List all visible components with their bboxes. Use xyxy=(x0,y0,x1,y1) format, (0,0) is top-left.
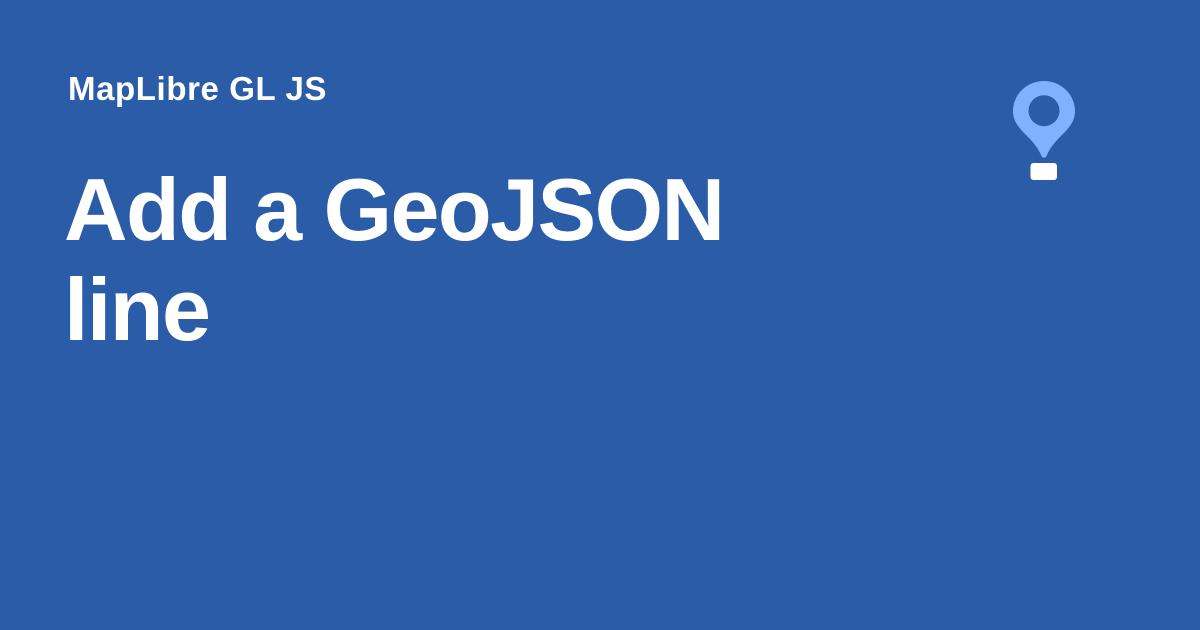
icon: map pin xyxy=(1013,81,1075,180)
title xyxy=(64,160,724,359)
title: Add a GeoJSON xyxy=(64,160,724,259)
eyebrow: product name: MapLibre GL JS xyxy=(68,70,327,107)
title: line xyxy=(64,260,209,359)
